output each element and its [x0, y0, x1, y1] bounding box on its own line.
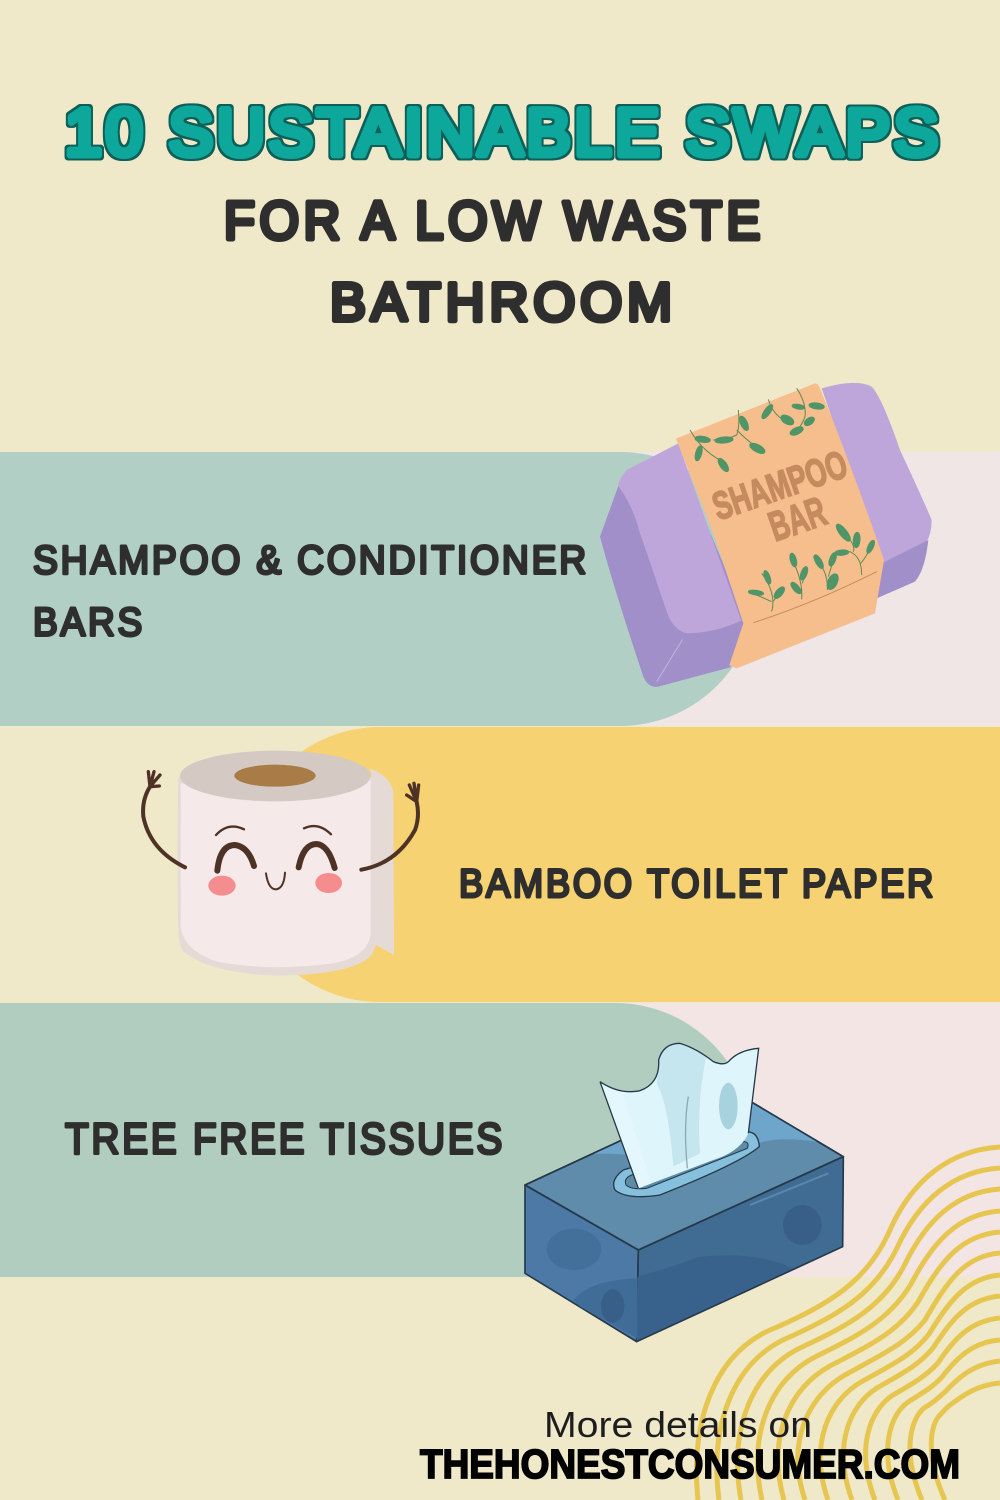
- icon: smiling toilet paper roll: [143, 751, 419, 976]
- label: tree free tissues: TREE FREE TISSUES: [65, 1114, 505, 1164]
- shampoo bar label text: BAR: [763, 487, 832, 550]
- arms: [143, 772, 419, 870]
- decorative wavy lines: [697, 1147, 1000, 1500]
- icon: shampoo bar: [600, 383, 932, 687]
- footer: more details text: More details on: [544, 1404, 812, 1445]
- subtitle line two: BATHROOM: [330, 272, 677, 332]
- tissue sheet: [600, 1043, 759, 1188]
- panel: bamboo toilet paper band: [242, 727, 1000, 1002]
- label: shampoo and conditioner bars: [33, 538, 589, 644]
- label: shampoo and conditioner bars: BARS: [33, 600, 145, 644]
- title: 10 SUSTAINABLE SWAPS: [65, 95, 942, 169]
- tissue slot: [614, 1132, 759, 1197]
- product line: [753, 572, 877, 623]
- face: [216, 826, 335, 889]
- shampoo bar label text: SHAMPOO: [707, 442, 853, 529]
- shampoo bar label text: [707, 442, 853, 550]
- panel: tree free tissues band: [0, 1003, 1000, 1277]
- subtitle line one: FOR A LOW WASTE: [224, 191, 765, 251]
- label: bamboo toilet paper: BAMBOO TOILET PAPER: [459, 862, 936, 906]
- icon: tissue box: [525, 1043, 843, 1342]
- label: shampoo and conditioner bars: SHAMPOO & CONDITIONER: [33, 538, 589, 582]
- leaf sprigs: [690, 388, 876, 612]
- panel: shampoo bars band: [0, 452, 1000, 726]
